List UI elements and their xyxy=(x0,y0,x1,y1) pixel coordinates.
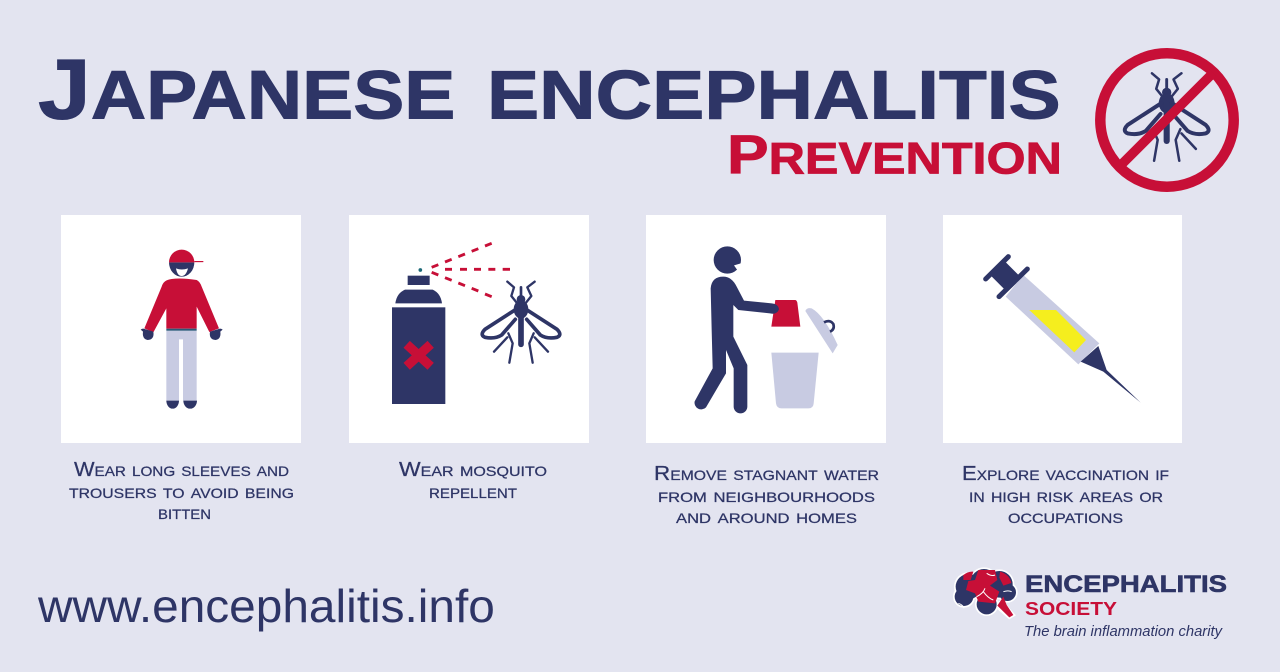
icon: person using bin xyxy=(695,246,838,413)
caption: repellent: repellent xyxy=(429,481,517,503)
icon: puzzle brain xyxy=(955,569,1016,617)
icon: person in long clothes xyxy=(141,250,223,409)
website url: www.encephalitis.info xyxy=(37,581,495,632)
logo: Encephalitis Society: The brain inflammation charity xyxy=(1024,623,1223,640)
logo: Encephalitis Society: SOCIETY xyxy=(1025,599,1117,619)
caption: long sleeves xyxy=(69,459,294,524)
subtitle: Prevention: PREVENTION xyxy=(727,125,1062,186)
title: Japanese encephalitis: JAPANESE xyxy=(38,42,455,137)
icon: no mosquito xyxy=(1100,53,1234,187)
logo: Encephalitis Society: ENCEPHALITIS xyxy=(1025,571,1227,598)
panel: remove stagnant water xyxy=(646,215,886,443)
icon: syringe xyxy=(986,257,1141,403)
panel: vaccination xyxy=(943,215,1182,443)
caption: vaccination: Explore vaccination if xyxy=(962,463,1169,485)
caption: vaccination: occupations xyxy=(1008,506,1123,528)
caption: stagnant water: and around homes xyxy=(676,506,857,528)
caption: stagnant water: Remove stagnant water xyxy=(654,463,879,485)
panel: repellent xyxy=(349,215,589,443)
caption: repellent: Wear mosquito xyxy=(399,459,547,481)
caption: stagnant water: from neighbourhoods xyxy=(658,485,875,507)
icon: spray can and mosquito xyxy=(392,243,560,404)
caption: stagnant water xyxy=(654,463,879,528)
caption: vaccination xyxy=(962,463,1169,528)
caption: long sleeves: trousers to avoid being xyxy=(69,481,294,503)
logo: Encephalitis Society xyxy=(955,569,1227,640)
title: Japanese encephalitis xyxy=(38,42,1061,137)
title: Japanese encephalitis: ENCEPHALITIS xyxy=(487,56,1061,133)
caption: vaccination: in high risk areas or xyxy=(969,485,1163,507)
caption: long sleeves: bitten xyxy=(158,502,211,524)
caption: long sleeves: Wear long sleeves and xyxy=(74,459,289,481)
panel: long sleeves xyxy=(61,215,301,443)
caption: repellent xyxy=(399,459,547,503)
